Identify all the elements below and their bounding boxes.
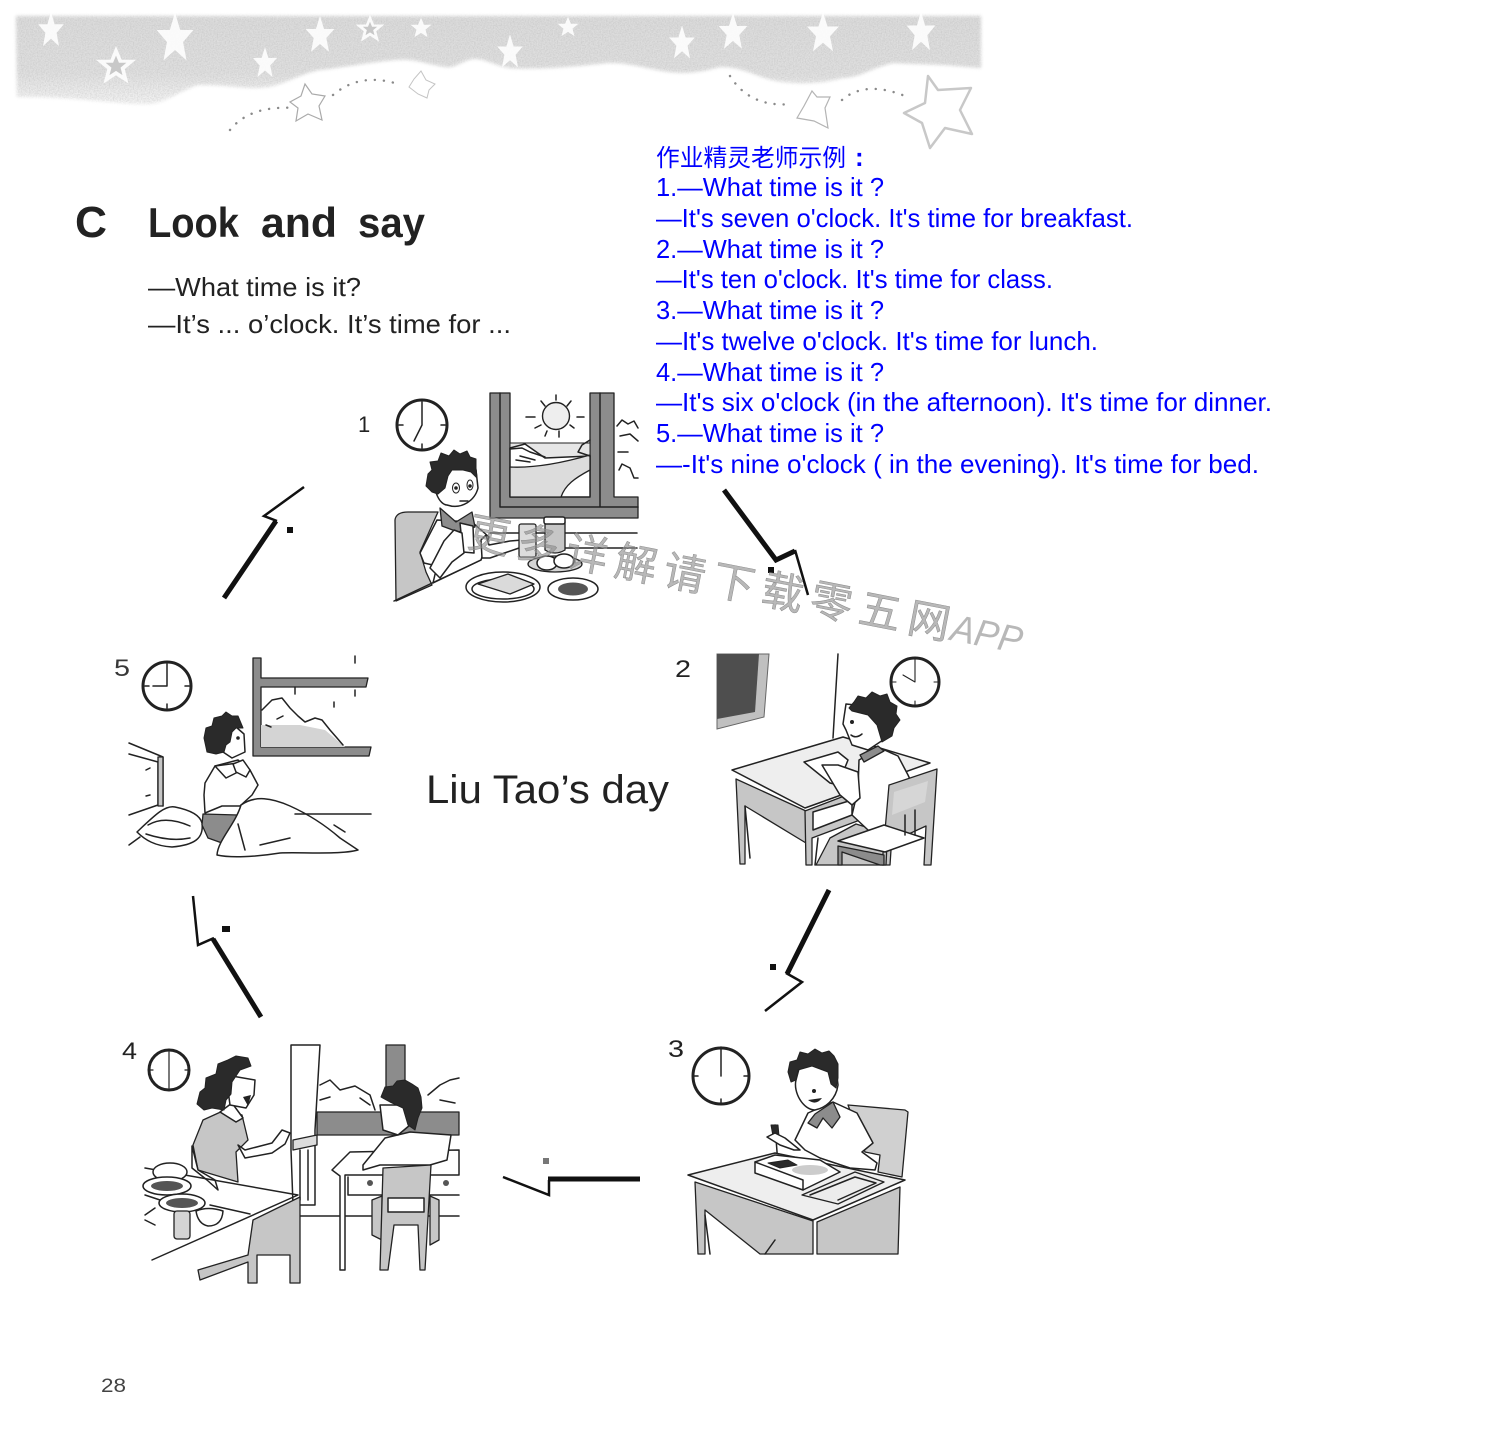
wall line <box>833 654 838 738</box>
number 2: 2 <box>675 656 691 683</box>
teacher example answers in blue: 5.—What time is it ? <box>656 418 884 448</box>
night window <box>253 656 371 756</box>
teacher example answers in blue: —It's seven o'clock. It's time for breakfast. <box>656 203 1133 233</box>
arrow: scene 3 to scene 4 <box>503 1158 640 1195</box>
number 3: 3 <box>668 1036 684 1063</box>
chair <box>838 769 937 865</box>
window with sun and hills <box>490 393 638 548</box>
clock: twelve o'clock <box>693 1047 749 1104</box>
model dialogue <box>148 272 511 339</box>
model dialogue: —What time is it? <box>148 272 361 302</box>
heading: C Look and say: and <box>261 199 337 246</box>
boy eating breakfast <box>395 450 522 601</box>
page number: 28 <box>101 1376 126 1397</box>
heading: C Look and say: Look <box>148 199 240 246</box>
scene 5: bedtime at nine <box>114 655 371 857</box>
blanket <box>217 799 371 857</box>
teacher example answers in blue: —-It's nine o'clock ( in the evening). It's time for bed. <box>656 449 1259 479</box>
teacher example answers in blue <box>656 142 1272 479</box>
teacher example answers in blue: —It's twelve o'clock. It's time for lunch. <box>656 326 1098 356</box>
arrow: scene 5 to scene 1 <box>224 487 304 598</box>
number 4: 4 <box>122 1038 137 1065</box>
scene 3: lunch at twelve <box>668 1036 908 1254</box>
boy at desk <box>332 1080 459 1270</box>
teacher example answers in blue: 3.—What time is it ? <box>656 295 884 325</box>
scene 4: dinner at six <box>122 1038 459 1283</box>
title: Liu Tao's day: Liu Tao’s day <box>426 768 669 812</box>
clock: six o'clock <box>149 1050 189 1090</box>
teacher example answers in blue: : <box>855 142 864 172</box>
teacher example answers in blue: 1.—What time is it ? <box>656 172 884 202</box>
boy eating lunch <box>767 1049 877 1170</box>
teacher example answers in blue: —It's ten o'clock. It's time for class. <box>656 264 1053 294</box>
watermark: 更多详解请下载零五网 <box>464 499 956 652</box>
teacher example answers in blue: —It's six o'clock (in the afternoon). It's time for dinner. <box>656 387 1272 417</box>
blackboard window <box>717 654 769 729</box>
clock: nine o'clock <box>143 662 191 710</box>
clock: ten o'clock <box>891 658 939 706</box>
bed headboard and pillow <box>129 743 202 847</box>
teacher example answers in blue: 作业精灵老师示例 <box>656 145 846 172</box>
boy reading <box>804 692 915 865</box>
number 1: 1 <box>358 412 370 437</box>
scene 2: class at ten <box>675 654 939 865</box>
boy sitting in bed <box>202 712 258 843</box>
desk <box>732 737 930 865</box>
arrow: scene 4 to scene 5 <box>193 896 261 1017</box>
table with lunch box <box>688 1153 905 1254</box>
table with food <box>394 517 598 602</box>
mother <box>192 1056 290 1190</box>
window and curtain <box>290 1045 459 1216</box>
scene 1: breakfast at seven <box>358 393 638 602</box>
teacher example answers in blue: 2.—What time is it ? <box>656 234 884 264</box>
teacher example answers in blue: 4.—What time is it ? <box>656 357 884 387</box>
heading: C Look and say: say <box>358 199 426 246</box>
clock: seven o'clock <box>397 400 447 450</box>
chair <box>848 1105 908 1177</box>
arrow: scene 1 to scene 2 <box>724 490 808 595</box>
model dialogue: —It’s ... o’clock. It’s time for ... <box>148 309 511 339</box>
heading: C Look and say <box>75 198 426 247</box>
dining chair <box>198 1197 300 1283</box>
heading: C Look and say: C <box>75 198 107 247</box>
number 5: 5 <box>114 655 130 682</box>
arrow: scene 2 to scene 3 <box>765 890 829 1011</box>
dinner table <box>143 1163 298 1260</box>
header band: starry sky <box>16 11 981 148</box>
watermark: APP <box>945 607 1027 663</box>
